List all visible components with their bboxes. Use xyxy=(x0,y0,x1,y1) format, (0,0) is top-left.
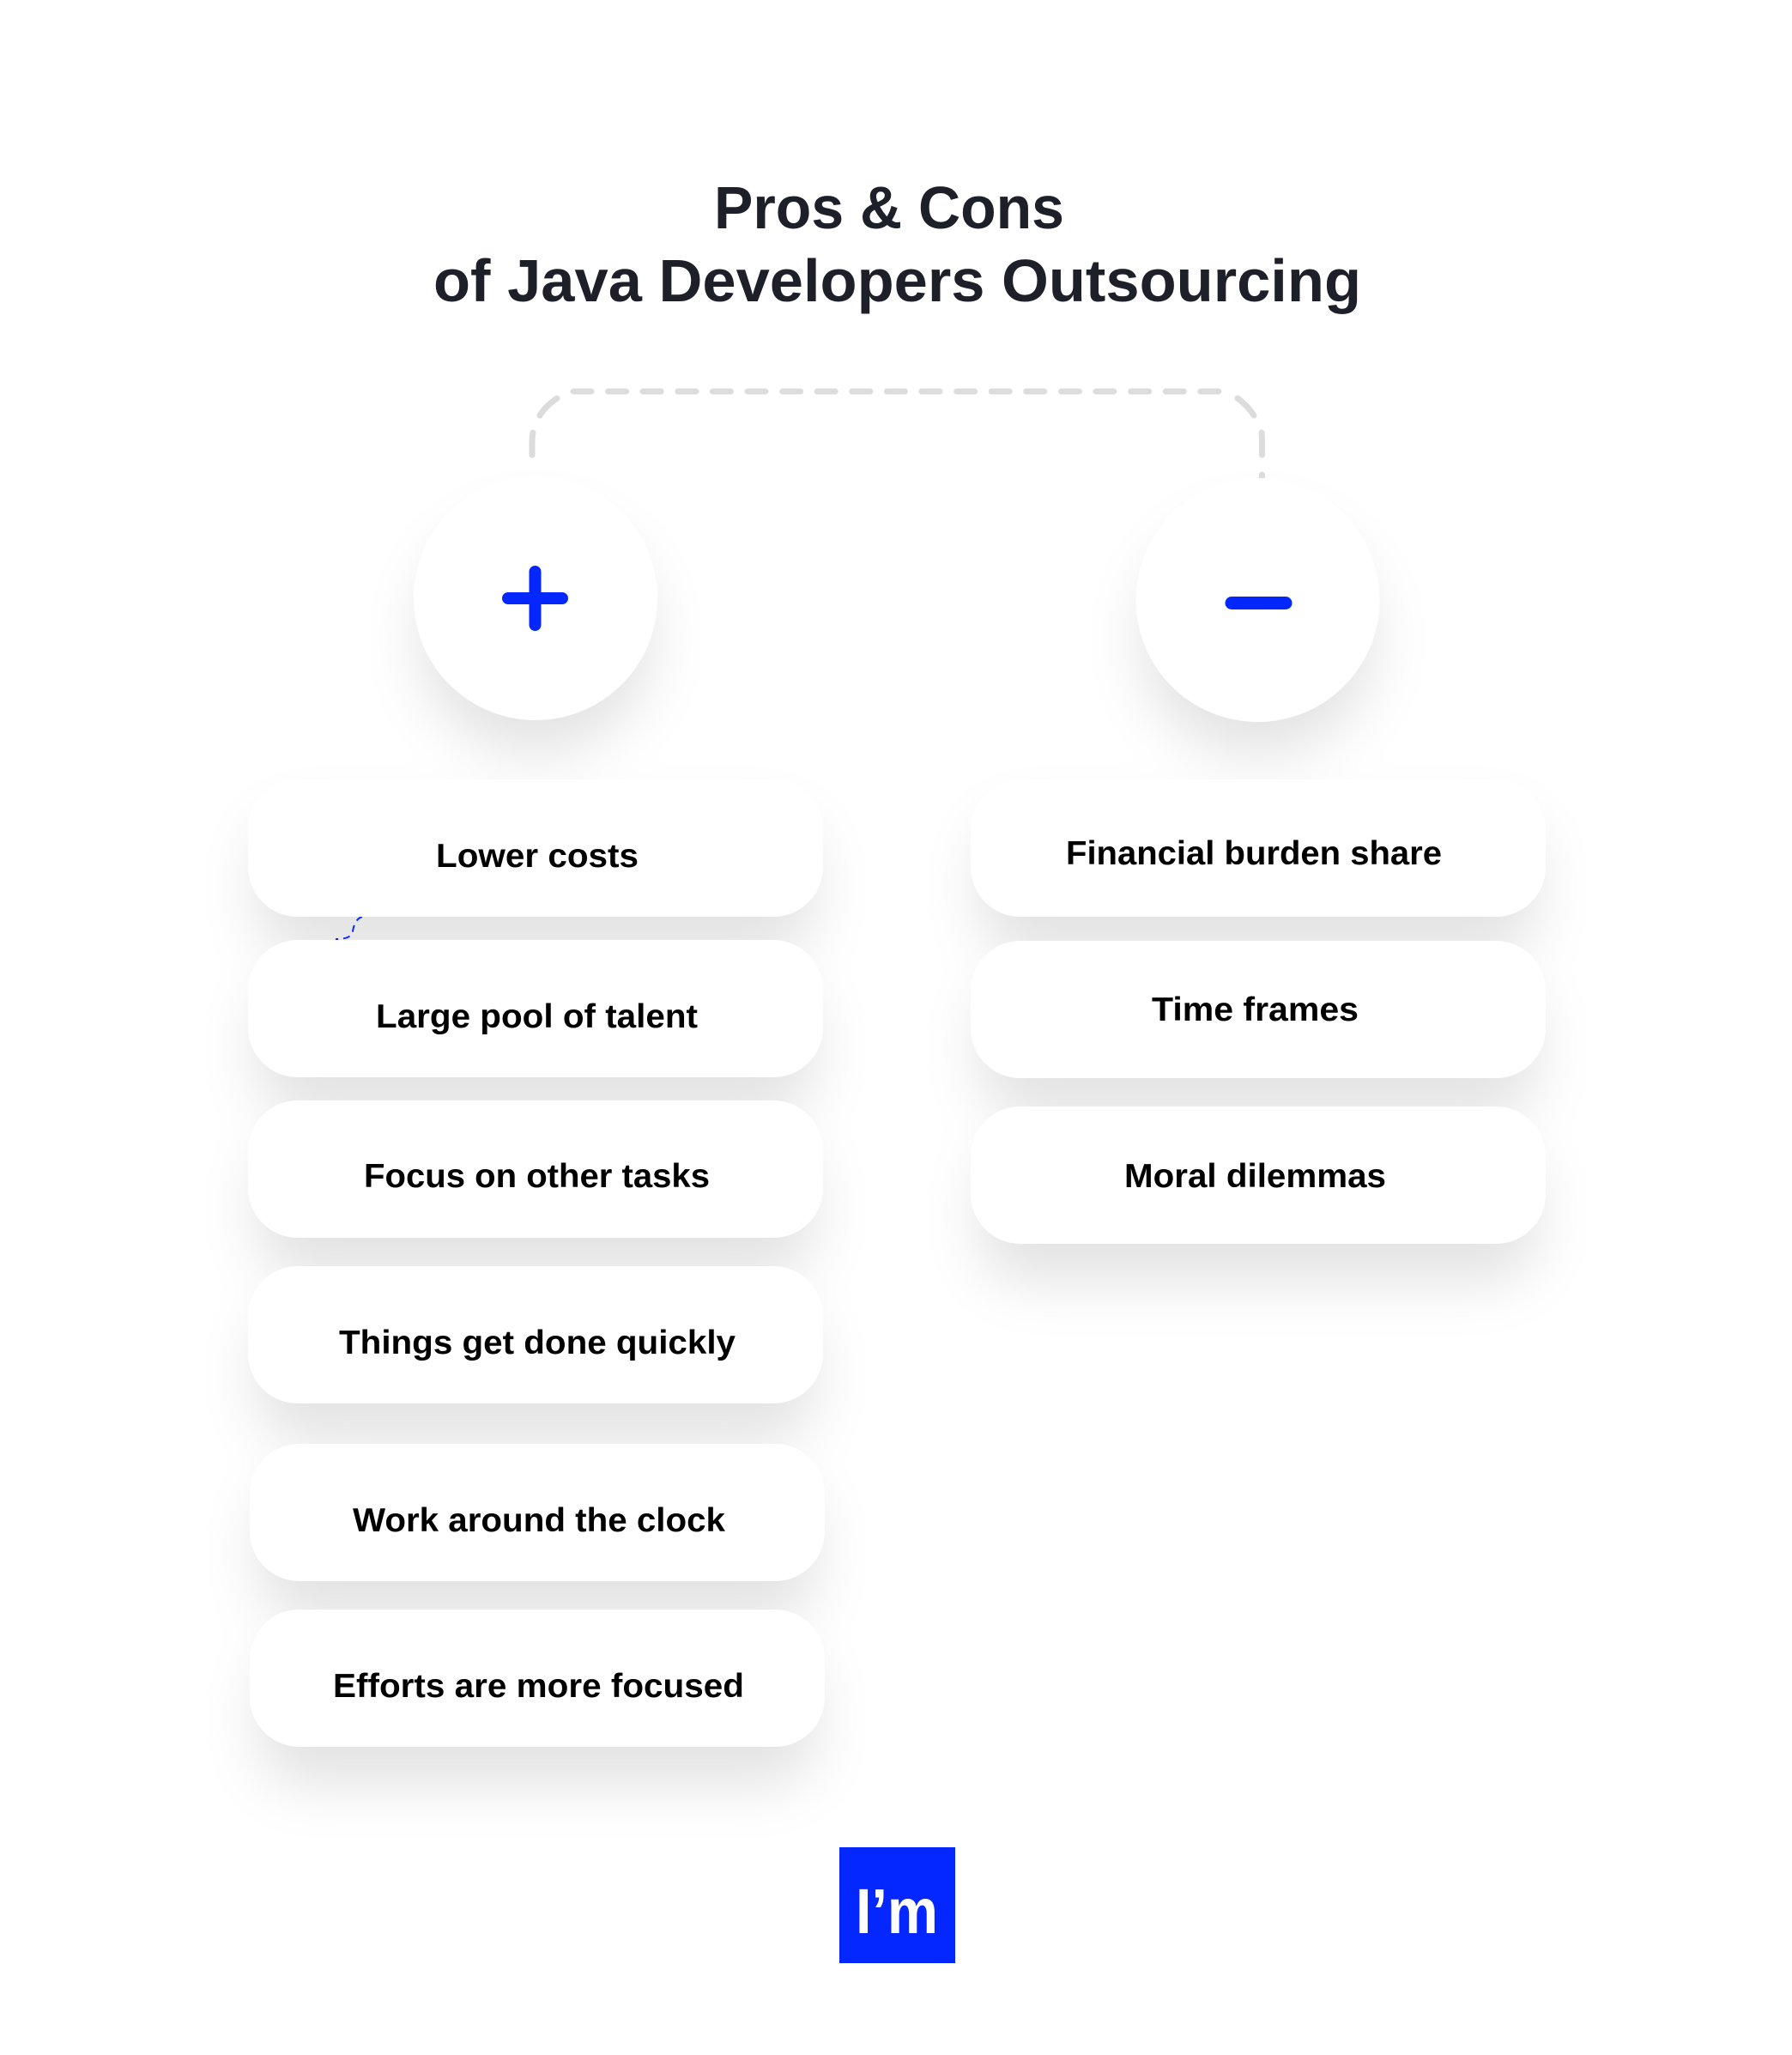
pro card: Large pool of talent: Large pool of talent xyxy=(376,998,698,1035)
title xyxy=(433,174,1361,314)
minus circle xyxy=(1136,478,1380,722)
pro card: Focus on other tasks xyxy=(248,1100,823,1238)
con card: Time frames: Time frames xyxy=(1152,991,1359,1028)
title: Pros & Cons xyxy=(714,174,1064,241)
plus circle xyxy=(414,476,657,720)
pro card: Work around the clock xyxy=(250,1444,825,1581)
con card: Time frames xyxy=(971,941,1546,1078)
pro card: Focus on other tasks: Focus on other tasks xyxy=(364,1158,710,1195)
pro card: Efforts are more focused: Efforts are more focused xyxy=(333,1668,744,1705)
dashed blue squiggle xyxy=(336,917,362,939)
logo: I’m xyxy=(856,1876,938,1947)
pro card: Large pool of talent xyxy=(248,940,823,1077)
title: of Java Developers Outsourcing xyxy=(433,247,1361,314)
logo xyxy=(839,1847,955,1963)
icon: minus xyxy=(1232,597,1286,609)
dashed connector between plus and minus xyxy=(532,391,1262,477)
pro card: Things get done quickly: Things get done quickly xyxy=(339,1325,736,1361)
icon: plus xyxy=(508,572,562,625)
con card: Moral dilemmas: Moral dilemmas xyxy=(1124,1158,1386,1195)
con card: Financial burden share: Financial burden share xyxy=(1066,835,1442,872)
con card: Moral dilemmas xyxy=(971,1106,1546,1244)
pro card: Lower costs xyxy=(248,779,823,917)
pro card: Lower costs: Lower costs xyxy=(436,838,639,875)
shadows beneath circles and cards xyxy=(257,482,1537,1747)
pro card: Work around the clock: Work around the clock xyxy=(353,1502,725,1539)
pro card: Things get done quickly xyxy=(248,1266,823,1403)
pro card: Efforts are more focused xyxy=(250,1609,825,1747)
con card: Financial burden share xyxy=(971,779,1546,917)
